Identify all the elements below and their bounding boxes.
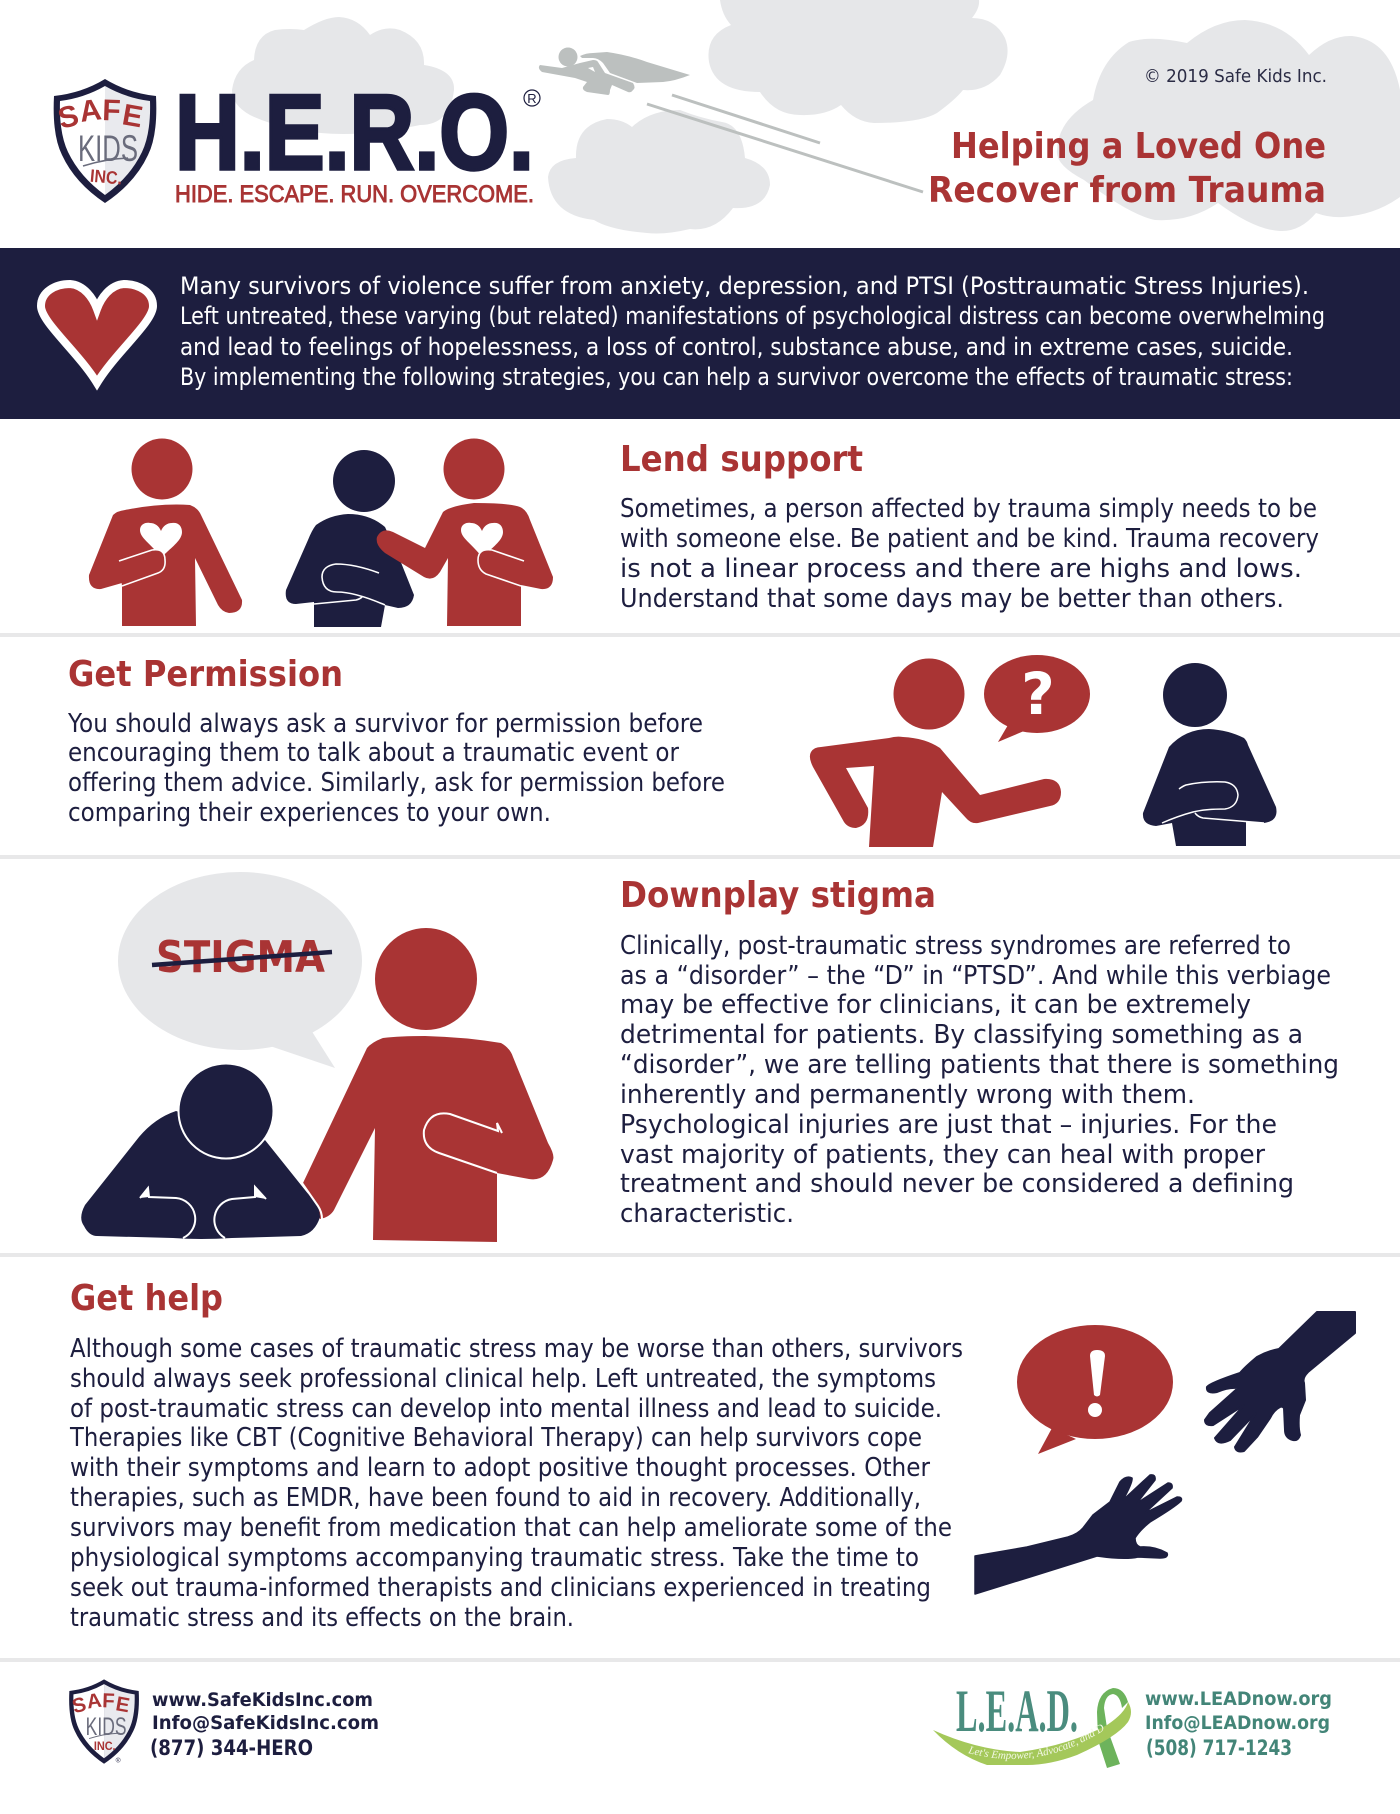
text: Lend support body [620,494,1319,614]
illustration: get help [975,1312,1355,1594]
text: Get Permission body [67,709,725,828]
text: Lend support body: Sometimes, a person affected by trauma simply needs to be [620,494,1317,524]
text: Get help body: should always seek professional clinical help. Left untreated, the symptoms [70,1364,936,1394]
header clouds [232,0,1400,234]
logo: H.E.R.O. wordmark: R [527,91,537,106]
footer: Safe Kids contact [150,1689,379,1760]
text: Get help body: with their symptoms and learn to adopt positive thought processes. Other [70,1453,930,1483]
text: Downplay stigma body: treatment and should never be considered a defining [620,1169,1294,1199]
logo: Safe Kids shield: KIDS [78,128,138,169]
text: Get help body: physiological symptoms accompanying traumatic stress. Take the time to [70,1543,919,1573]
footer: LEAD logo [933,1678,1131,1768]
heading: Get help: Get help [70,1278,223,1319]
text: Downplay stigma body: as a “disorder” – the “D” in “PTSD”. And while this verbiage [620,961,1331,991]
intro text: and lead to feelings of hopelessness, a loss of control, substance abuse, and in extreme cases, suicide. [180,333,1293,361]
illustration: lend support figures [89,438,553,627]
text: Lend support body: with someone else. Be patient and be kind. Trauma recovery [620,524,1319,554]
logo: H.E.R.O. wordmark: H.E.R.O. [175,72,534,192]
figure: listening person with crossed arms [1143,663,1276,846]
text: Get help body: survivors may benefit from medication that can help ameliorate some of the [70,1513,952,1543]
text: Lend support body: is not a linear process and there are highs and lows. [620,554,1302,584]
figure: seated survivor head down [81,1064,322,1239]
text: Get help body [69,1334,963,1633]
text: Get Permission body: encouraging them to talk about a traumatic event or [68,738,679,768]
text: Downplay stigma body: inherently and permanently wrong with them. [620,1080,1195,1110]
figure: person with arm around [377,438,553,626]
footer: Safe Kids logo: SAFE [70,1690,131,1718]
figure: navy person being comforted [286,450,414,627]
title: Recover from Trauma [928,170,1326,211]
text: Downplay stigma body: characteristic. [620,1199,794,1229]
speech bubble: question mark: ? [1021,660,1055,728]
text: Downplay stigma body: “disorder”, we are telling patients that there is something [620,1050,1339,1080]
text: Downplay stigma body: Clinically, post-traumatic stress syndromes are referred to [620,931,1291,961]
text: Get help body: Although some cases of traumatic stress may be worse than others, survivors [70,1334,963,1364]
text: Get Permission body: comparing their experiences to your own. [68,798,551,828]
text: Get help body: Therapies like CBT (Cognitive Behavioral Therapy) can help survivors cope [69,1423,922,1453]
speech bubble: stigma: STIGMA [156,932,325,983]
footer: LEAD contact: Info@LEADnow.org [1145,1712,1330,1734]
text: Get help body: seek out trauma-informed therapists and clinicians experienced in treating [70,1573,931,1603]
heading: Get Permission: Get Permission [68,654,343,695]
text: Get Permission body: offering them advice. Similarly, ask for permission before [68,768,725,798]
footer: Safe Kids logo: INC. [94,1739,116,1753]
text: Downplay stigma body [620,931,1339,1229]
footer: LEAD contact [1145,1688,1332,1760]
icon: flying superhero with speed lines [539,48,923,192]
copyright: © 2019 Safe Kids Inc. [1144,66,1327,87]
text: Downplay stigma body: vast majority of patients, they can heal with proper [620,1140,1265,1170]
tagline: HIDE. ESCAPE. RUN. OVERCOME. [175,181,534,208]
text: Get help body: therapies, such as EMDR, have been found to aid in recovery. Additionally, [70,1483,921,1513]
speech bubble: stigma [118,872,362,1068]
intro text: Many survivors of violence suffer from anxiety, depression, and PTSI (Posttraumatic Stress Injuries). [180,272,1309,300]
speech bubble: question mark [984,655,1090,742]
text: Get help body: traumatic stress and its effects on the brain. [70,1603,574,1633]
illustration: asking permission [810,655,1276,847]
text: Downplay stigma body: may be effective for clinicians, it can be extremely [620,990,1251,1020]
text: Downplay stigma body: detrimental for patients. By classifying something as a [620,1020,1303,1050]
footer: Safe Kids contact: Info@SafeKidsInc.com [152,1712,379,1734]
icon: hand reaching up [975,1475,1182,1594]
heading: Downplay stigma: Downplay stigma [620,875,936,916]
title: Helping a Loved One [951,126,1326,167]
footer: Safe Kids contact: www.SafeKidsInc.com [152,1689,373,1711]
figure: standing supporter [303,928,553,1242]
logo: Safe Kids shield: INC. [89,166,123,188]
footer: Safe Kids logo [69,1679,139,1764]
icon: hand reaching down [1205,1312,1355,1452]
footer: Safe Kids contact: (877) 344-HERO [150,1736,313,1760]
panel: intro band [0,248,1400,419]
icon: heart [41,284,153,383]
text: Get Permission body: You should always ask a survivor for permission before [67,709,703,739]
text: Downplay stigma body: Psychological injuries are just that – injuries. For the [620,1110,1277,1140]
speech bubble: exclamation [1017,1325,1173,1454]
logo: Safe Kids shield [54,79,156,203]
footer: LEAD contact: (508) 717-1243 [1146,1736,1292,1760]
footer: LEAD logo: Let's Empower, Advocate, and Do! [968,1724,1104,1762]
footer: LEAD contact: www.LEADnow.org [1145,1688,1332,1710]
text: Lend support body: Understand that some days may be better than others. [620,584,1284,614]
title [928,126,1326,211]
figure: person with heart [89,438,242,626]
footer: Safe Kids logo: ® [116,1756,121,1764]
footer: LEAD logo: L.E.A.D. [956,1678,1078,1744]
intro text [180,272,1325,391]
logo: Safe Kids shield: SAFE [55,93,145,136]
illustration: downplay stigma [81,872,553,1242]
figure: asking person [810,658,1061,847]
text: Get help body: of post-traumatic stress can develop into mental illness and lead to suicide. [70,1394,942,1424]
footer: Safe Kids logo: KIDS [86,1713,126,1741]
heading: Lend support: Lend support [620,439,863,480]
